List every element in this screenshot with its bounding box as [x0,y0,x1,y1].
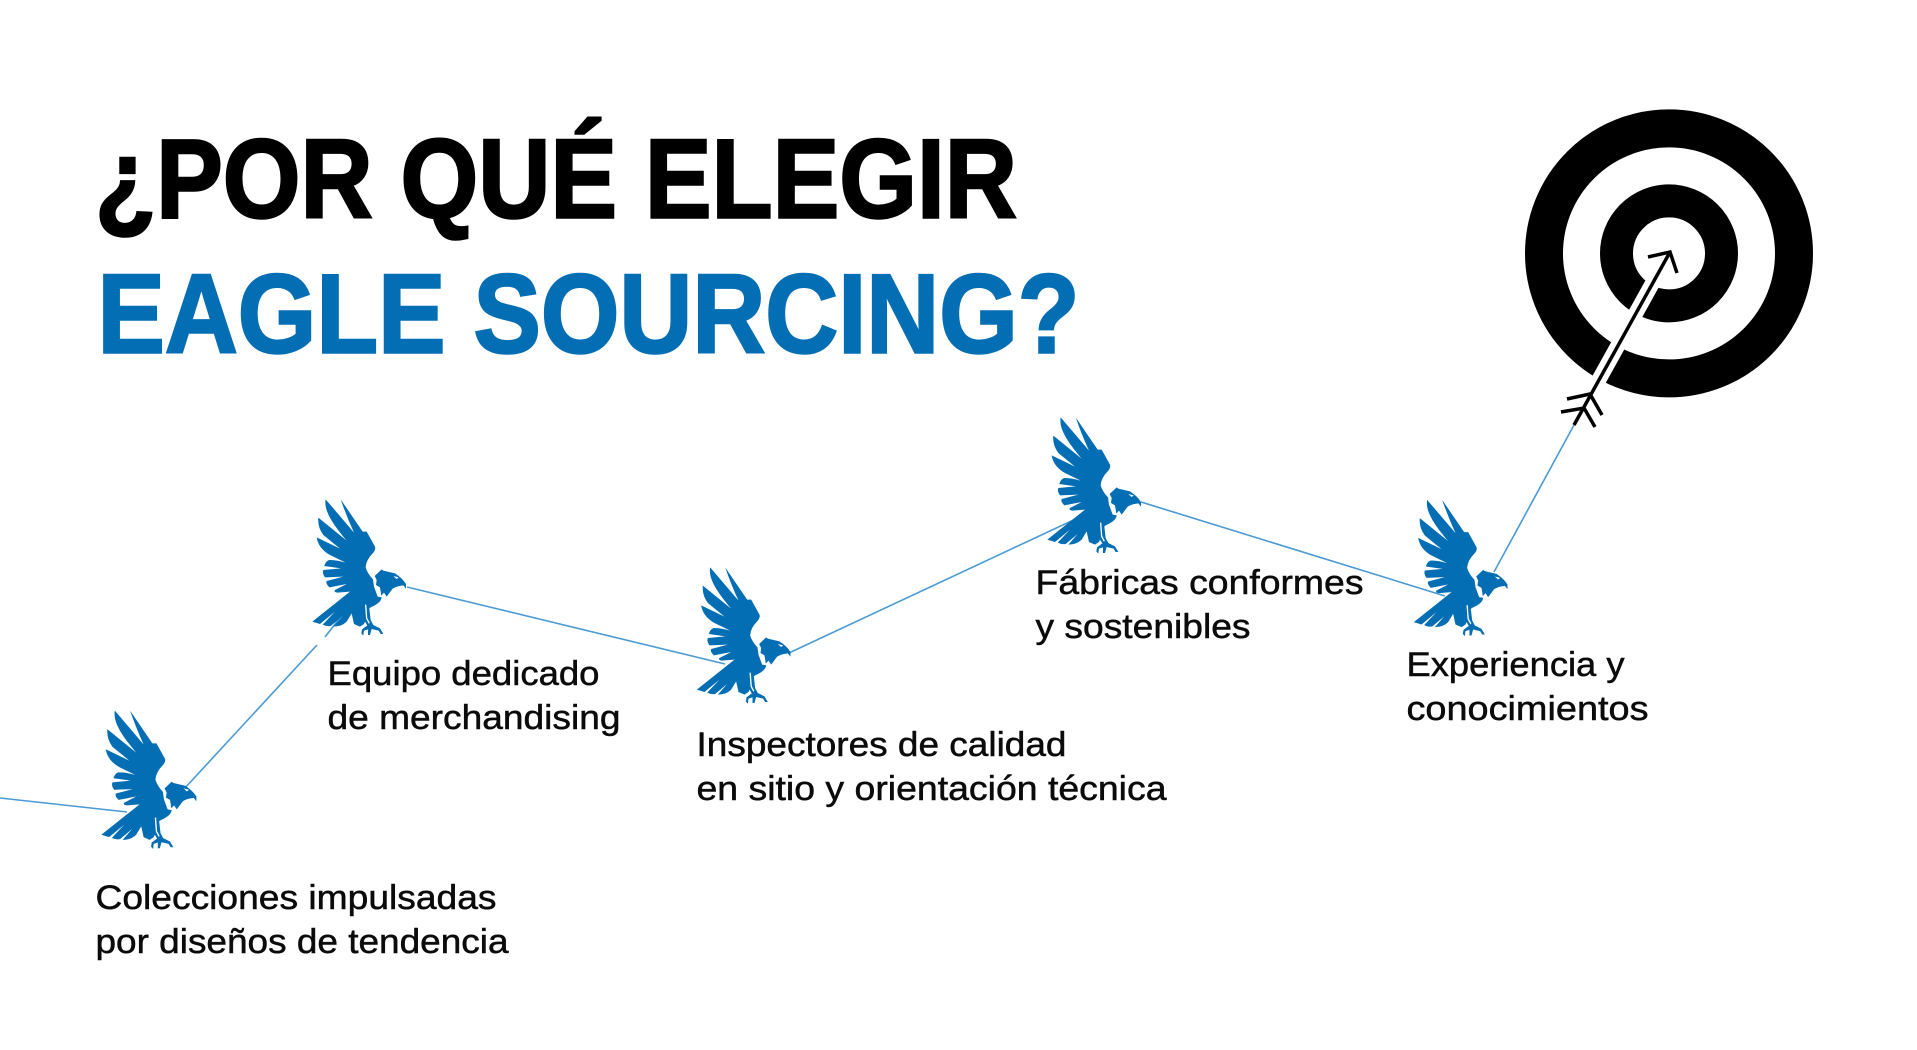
icon: target with arrow [1544,128,1794,427]
target rings [1544,128,1794,378]
step 1: text [96,879,509,961]
step 3: text [696,726,1167,808]
step 5: text: Experiencia y [1406,646,1625,684]
step 5: eagle [1414,500,1507,636]
step 4: text [1036,564,1364,646]
step 1: text: por diseños de tendencia [96,923,509,961]
step 3: text: Inspectores de calidad [696,726,1066,764]
step 2: eagle [312,499,406,636]
step 5: text: conocimientos [1406,690,1648,728]
step 2: text [328,655,620,737]
step 1: eagle [101,711,196,849]
step 1: text: Colecciones impulsadas [96,879,496,917]
step 5: text [1406,646,1648,728]
step 3: eagle [697,567,790,704]
step 4: text: y sostenibles [1036,608,1250,646]
step 2: text: Equipo dedicado [328,655,600,693]
connecting path line [0,425,1574,812]
step 4: eagle [1047,417,1141,554]
arrow [1561,248,1677,427]
step 2: text: de merchandising [328,699,620,737]
title line 1: ¿POR QUÉ ELEGIR [95,116,1017,242]
step 4: text: Fábricas conformes [1036,564,1364,602]
title line 2: EAGLE SOURCING? [98,252,1080,376]
title [95,116,1080,376]
step 3: text: en sitio y orientación técnica [696,770,1167,808]
